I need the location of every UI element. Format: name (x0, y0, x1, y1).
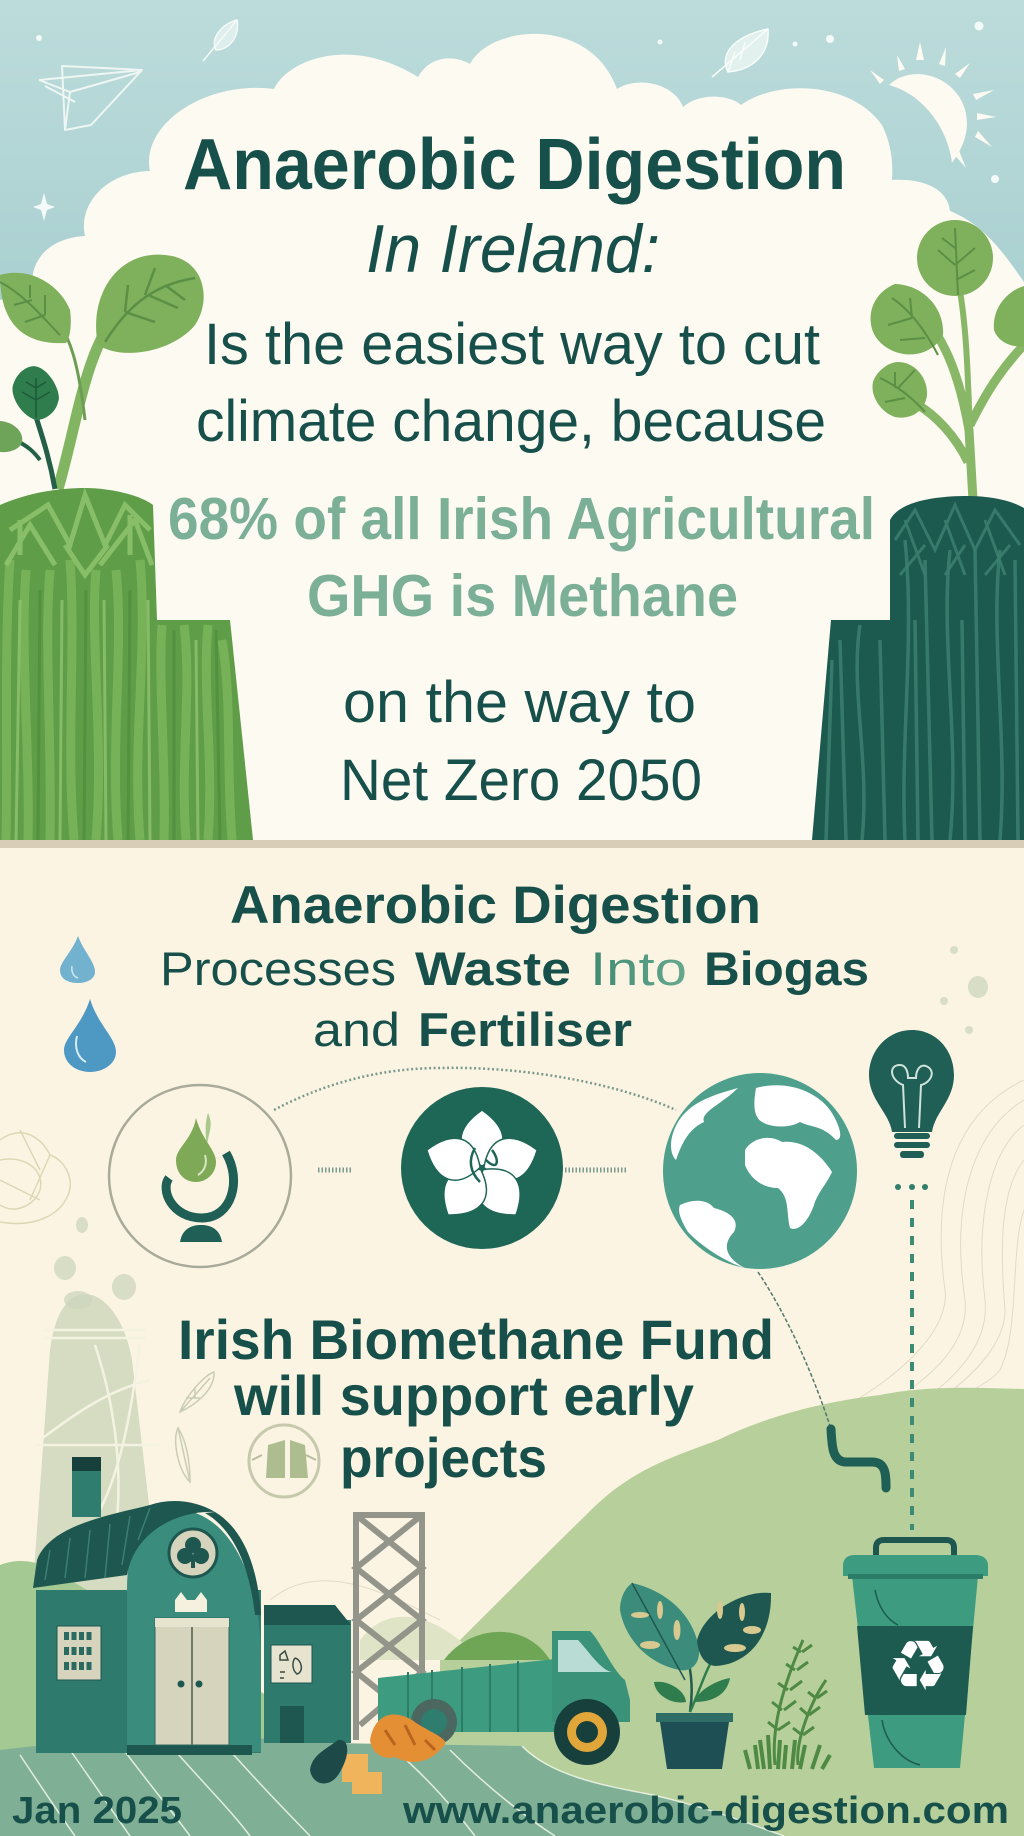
icon: burner circle (109, 1085, 291, 1267)
right plant tree (871, 220, 1024, 500)
heading: biomethane fund line 3: projects (340, 1426, 547, 1489)
icon: globe (663, 1073, 857, 1269)
title: Anaerobic Digestion (183, 125, 846, 205)
text: processes waste into biogas: Processes (160, 942, 396, 995)
truck rear wheel (411, 1699, 457, 1745)
barn door (155, 1618, 229, 1745)
footer website: www.anaerobic-digestion.com (402, 1790, 1009, 1832)
background: small middle hills (360, 1617, 550, 1660)
background: left hill (0, 1561, 360, 1836)
background: large light green hill (440, 1388, 1024, 1836)
text: and fertiliser: and (313, 1003, 400, 1056)
text: processes waste into biogas: Into (590, 942, 687, 995)
icon: sketched feather (180, 1372, 214, 1412)
text: and fertiliser: Fertiliser (418, 1003, 632, 1056)
truck front wheel (554, 1699, 620, 1765)
decorative stars and dots (33, 22, 999, 221)
dotted connector: arc across icons (274, 1068, 676, 1110)
barn round badge (169, 1529, 217, 1577)
footer date: Jan 2025 (12, 1790, 182, 1832)
section heading: Anaerobic Digestion (230, 876, 761, 935)
icon: sun (870, 42, 996, 168)
text: claim line 2: climate change, because (196, 389, 826, 454)
icon: small water drop (60, 936, 95, 983)
dotted connector: bulb to bin (895, 1184, 928, 1530)
dotted connector: flower to globe (565, 1168, 627, 1172)
decorative soft blobs (54, 946, 988, 1309)
icon: flower circle (401, 1087, 563, 1249)
lattice tower (356, 1515, 422, 1740)
decorative line sketch (0, 1130, 70, 1223)
fern plants (745, 1640, 830, 1769)
heading: biomethane fund line 2: will support early (233, 1364, 694, 1427)
left plant sprouts (0, 255, 204, 489)
text: processes waste into biogas (160, 942, 869, 995)
foreground field road (0, 1738, 784, 1836)
globe: South America (679, 1201, 745, 1268)
annex building (264, 1605, 351, 1743)
right dark green pillar (812, 496, 1024, 840)
text: processes waste into biogas: Waste (415, 942, 571, 995)
icon: small sketched leaf (203, 20, 237, 61)
left green pillar (0, 488, 253, 840)
barn building (33, 1457, 261, 1755)
barn small emblem (175, 1592, 207, 1612)
background: silo silhouette (29, 1294, 165, 1640)
icon: large water drop (64, 999, 116, 1072)
icon: white sketched leaf (712, 29, 768, 77)
text: and fertiliser (313, 1003, 632, 1056)
section divider (0, 840, 1024, 848)
globe: Africa (745, 1138, 832, 1229)
icon: squiggle pipe (831, 1429, 886, 1488)
globe: North America (671, 1088, 738, 1160)
background: sky (0, 0, 1024, 320)
text: claim line 1: Is the easiest way to cut (204, 312, 820, 377)
background: cloud panel (0, 34, 1024, 840)
waste pile (310, 1715, 445, 1794)
globe: Europe and Asia (754, 1085, 840, 1140)
dotted connector: circle to flower (318, 1168, 353, 1172)
text: net zero line 2: Net Zero 2050 (340, 748, 702, 813)
heading: biomethane fund line 1: Irish Biomethane Fund (178, 1308, 774, 1371)
subtitle: In Ireland: (366, 211, 660, 287)
truck (378, 1631, 630, 1765)
icon: paper plane (39, 66, 142, 130)
potted plant (620, 1583, 771, 1769)
background: lower section (0, 840, 1024, 1836)
text: processes waste into biogas: Biogas (704, 942, 869, 995)
icon: ring with boots sketch (249, 1425, 319, 1497)
decorative faint contour lines (270, 1080, 1024, 1620)
icon: sketched leaf (176, 1428, 190, 1482)
icon: light bulb (869, 1030, 954, 1158)
dotted connector: globe to pipe (758, 1272, 830, 1426)
highlight: methane line 1: 68% of all Irish Agricultural (168, 486, 875, 552)
icon: recycling symbol: ♻ (887, 1625, 949, 1707)
recycling bin (843, 1540, 988, 1768)
highlight: methane line 2: GHG is Methane (307, 563, 738, 629)
text: net zero line 1: on the way to (343, 670, 696, 735)
barn window (57, 1626, 101, 1680)
